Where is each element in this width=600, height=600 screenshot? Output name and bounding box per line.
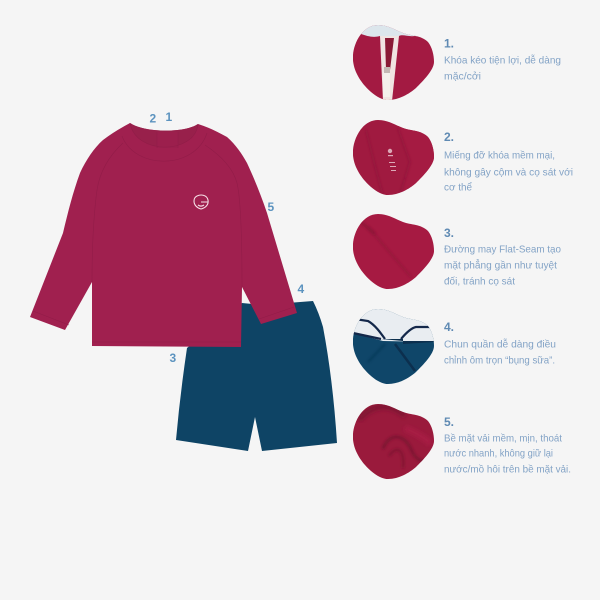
callout number 1: 1	[166, 110, 172, 124]
item 5 text: Bề mặt vải mềm, mịn, thoát	[444, 432, 562, 444]
item 3 text: mặt phẳng gần như tuyệt	[444, 258, 557, 272]
item 5 text	[444, 415, 571, 476]
item 5 text: nước/mồ hôi trên bề mặt vải.	[444, 464, 571, 476]
item 2 text: không gây cộm và cọ sát với	[444, 166, 573, 178]
placket label	[388, 149, 396, 171]
item 2 text: cơ thể	[444, 182, 472, 194]
item 3 text: 3.	[444, 226, 454, 240]
item 5 text: nước nhanh, không giữ lại	[444, 448, 553, 460]
item 2 text: Miếng đỡ khóa mềm mại,	[444, 150, 555, 162]
callout number 5: 5	[268, 200, 274, 214]
product: long sleeve rash shirt	[30, 123, 297, 347]
item 4 text: 4.	[444, 320, 454, 334]
neck interior with back zipper placket	[130, 123, 198, 147]
heart photo 3: flat seam	[353, 214, 434, 290]
item 4 text: chỉnh ôm trọn “bụng sữa”.	[444, 354, 555, 366]
item 4 text	[444, 320, 556, 366]
callout number 3: 3	[170, 351, 176, 365]
item 1 text: Khóa kéo tiện lợi, dễ dàng	[444, 54, 561, 66]
heart photo 4: waistband	[353, 309, 434, 385]
item 1 text	[444, 36, 561, 82]
heart photo 2: zipper placket	[353, 120, 434, 196]
item 3 text	[444, 226, 561, 288]
callout number 2: 2	[150, 112, 156, 126]
shirt logo	[194, 195, 208, 209]
item 2 text	[444, 130, 573, 194]
item 3 text: đối, tránh cọ sát	[444, 276, 515, 288]
heart photo 5: fabric surface	[353, 404, 434, 480]
item 1 text: 1.	[444, 36, 454, 50]
product: swim shorts	[176, 301, 337, 451]
callout number 4: 4	[298, 282, 304, 296]
item 3 text: Đường may Flat-Seam tạo	[444, 244, 561, 256]
item 2 text: 2.	[444, 130, 454, 144]
item 4 text: Chun quần dễ dàng điều	[444, 338, 556, 350]
item 1 text: mặc/cởi	[444, 70, 481, 82]
item 5 text: 5.	[444, 415, 454, 429]
shirt seams	[33, 123, 294, 342]
heart photo 1: zipper	[353, 25, 434, 101]
